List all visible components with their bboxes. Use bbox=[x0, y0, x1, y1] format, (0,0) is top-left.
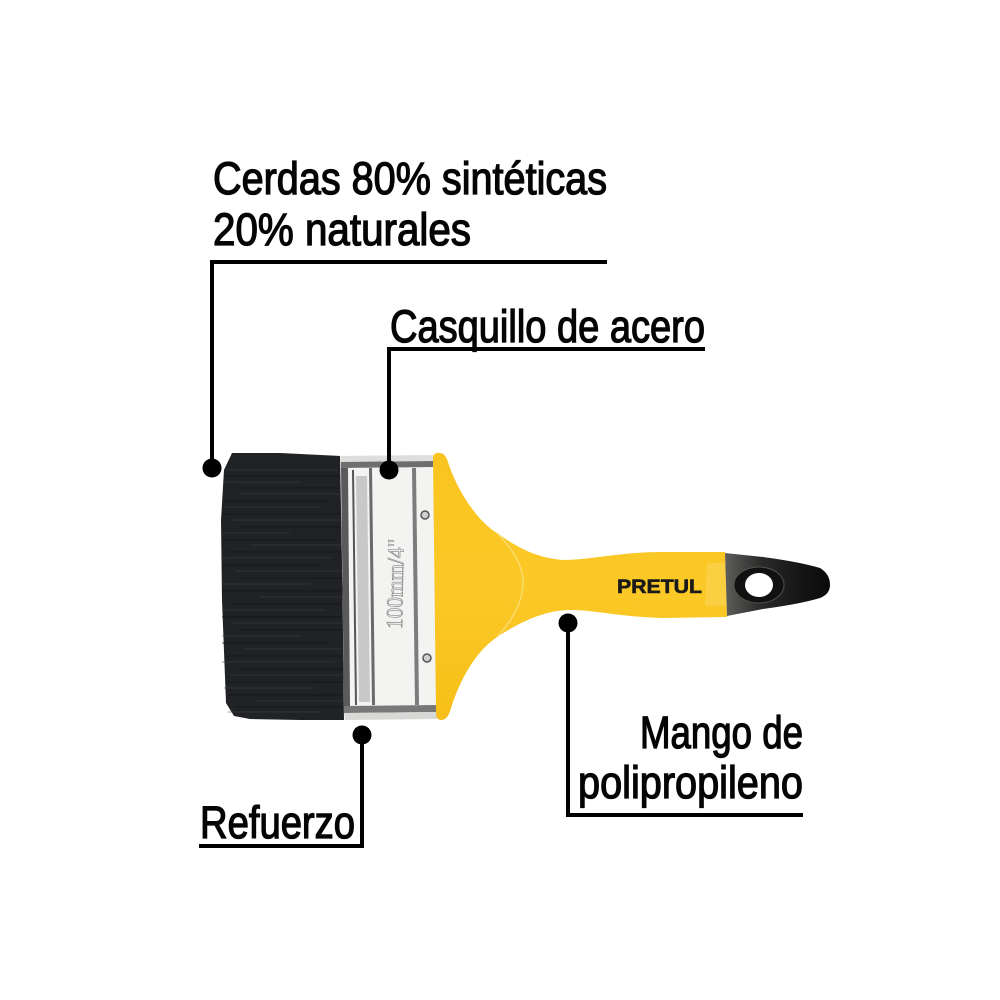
logo: PRETUL bbox=[617, 576, 702, 598]
rivet top bbox=[421, 511, 429, 519]
hanging hole bbox=[745, 573, 773, 597]
yellow handle bbox=[433, 453, 727, 720]
rivet bottom bbox=[423, 654, 431, 662]
knurled reinforcement rib bbox=[356, 476, 370, 702]
callout: reinforcement: Refuerzo bbox=[200, 797, 355, 848]
callout: steel ferrule bbox=[380, 301, 705, 480]
callout: bristles bbox=[202, 153, 607, 478]
stamped size: 100mm/4" bbox=[382, 539, 409, 629]
callout: steel ferrule: Casquillo de acero bbox=[390, 301, 705, 352]
callout: bristles: Cerdas 80% sintéticas bbox=[213, 153, 607, 204]
steel ferrule bbox=[340, 455, 437, 720]
black handle tip bbox=[725, 553, 830, 616]
callout: reinforcement bbox=[199, 726, 372, 848]
callout: polypropylene handle bbox=[558, 614, 803, 815]
bristles bbox=[221, 453, 344, 720]
callout: polypropylene handle: polipropileno bbox=[578, 757, 803, 808]
brush illustration bbox=[221, 453, 830, 720]
callout: polypropylene handle: Mango de bbox=[640, 707, 803, 758]
callout: bristles: 20% naturales bbox=[213, 204, 471, 255]
